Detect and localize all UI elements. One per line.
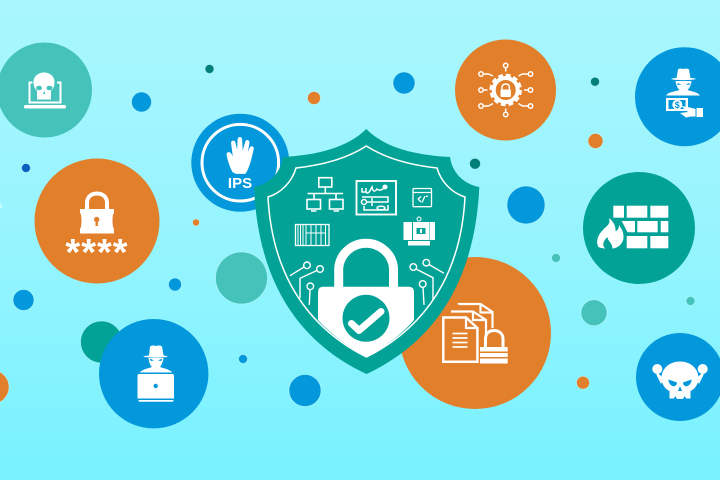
central shield [254, 129, 479, 374]
icon badge: spy taking money [635, 47, 720, 146]
icon: network diagram [307, 178, 343, 211]
scattered dots [0, 64, 695, 406]
icon badge: skull on laptop [0, 42, 92, 138]
icon badge: gear with lock and circuit nodes [455, 40, 556, 140]
icon: equipment rack [296, 224, 329, 246]
shield body [254, 129, 479, 374]
icon: control panel [356, 181, 396, 214]
icon: CNC machine [404, 217, 435, 246]
icon badge: evil skull [636, 333, 720, 421]
icon badge: locked documents [399, 257, 551, 409]
icon: code window [413, 188, 432, 207]
icon badge: IPS stop hand [191, 114, 289, 212]
icon badge: IPS stop hand: IPS [228, 175, 252, 192]
padlock with check [318, 243, 414, 357]
icon badge: password lock [34, 158, 160, 284]
icon badge: password lock: **** [65, 232, 129, 274]
shield inner outline [268, 146, 465, 357]
icon badge: firewall [583, 172, 695, 284]
circuit traces [290, 259, 444, 305]
icon badge: spy taking money: $ [675, 100, 680, 110]
icon badge: spy with laptop [99, 319, 208, 428]
